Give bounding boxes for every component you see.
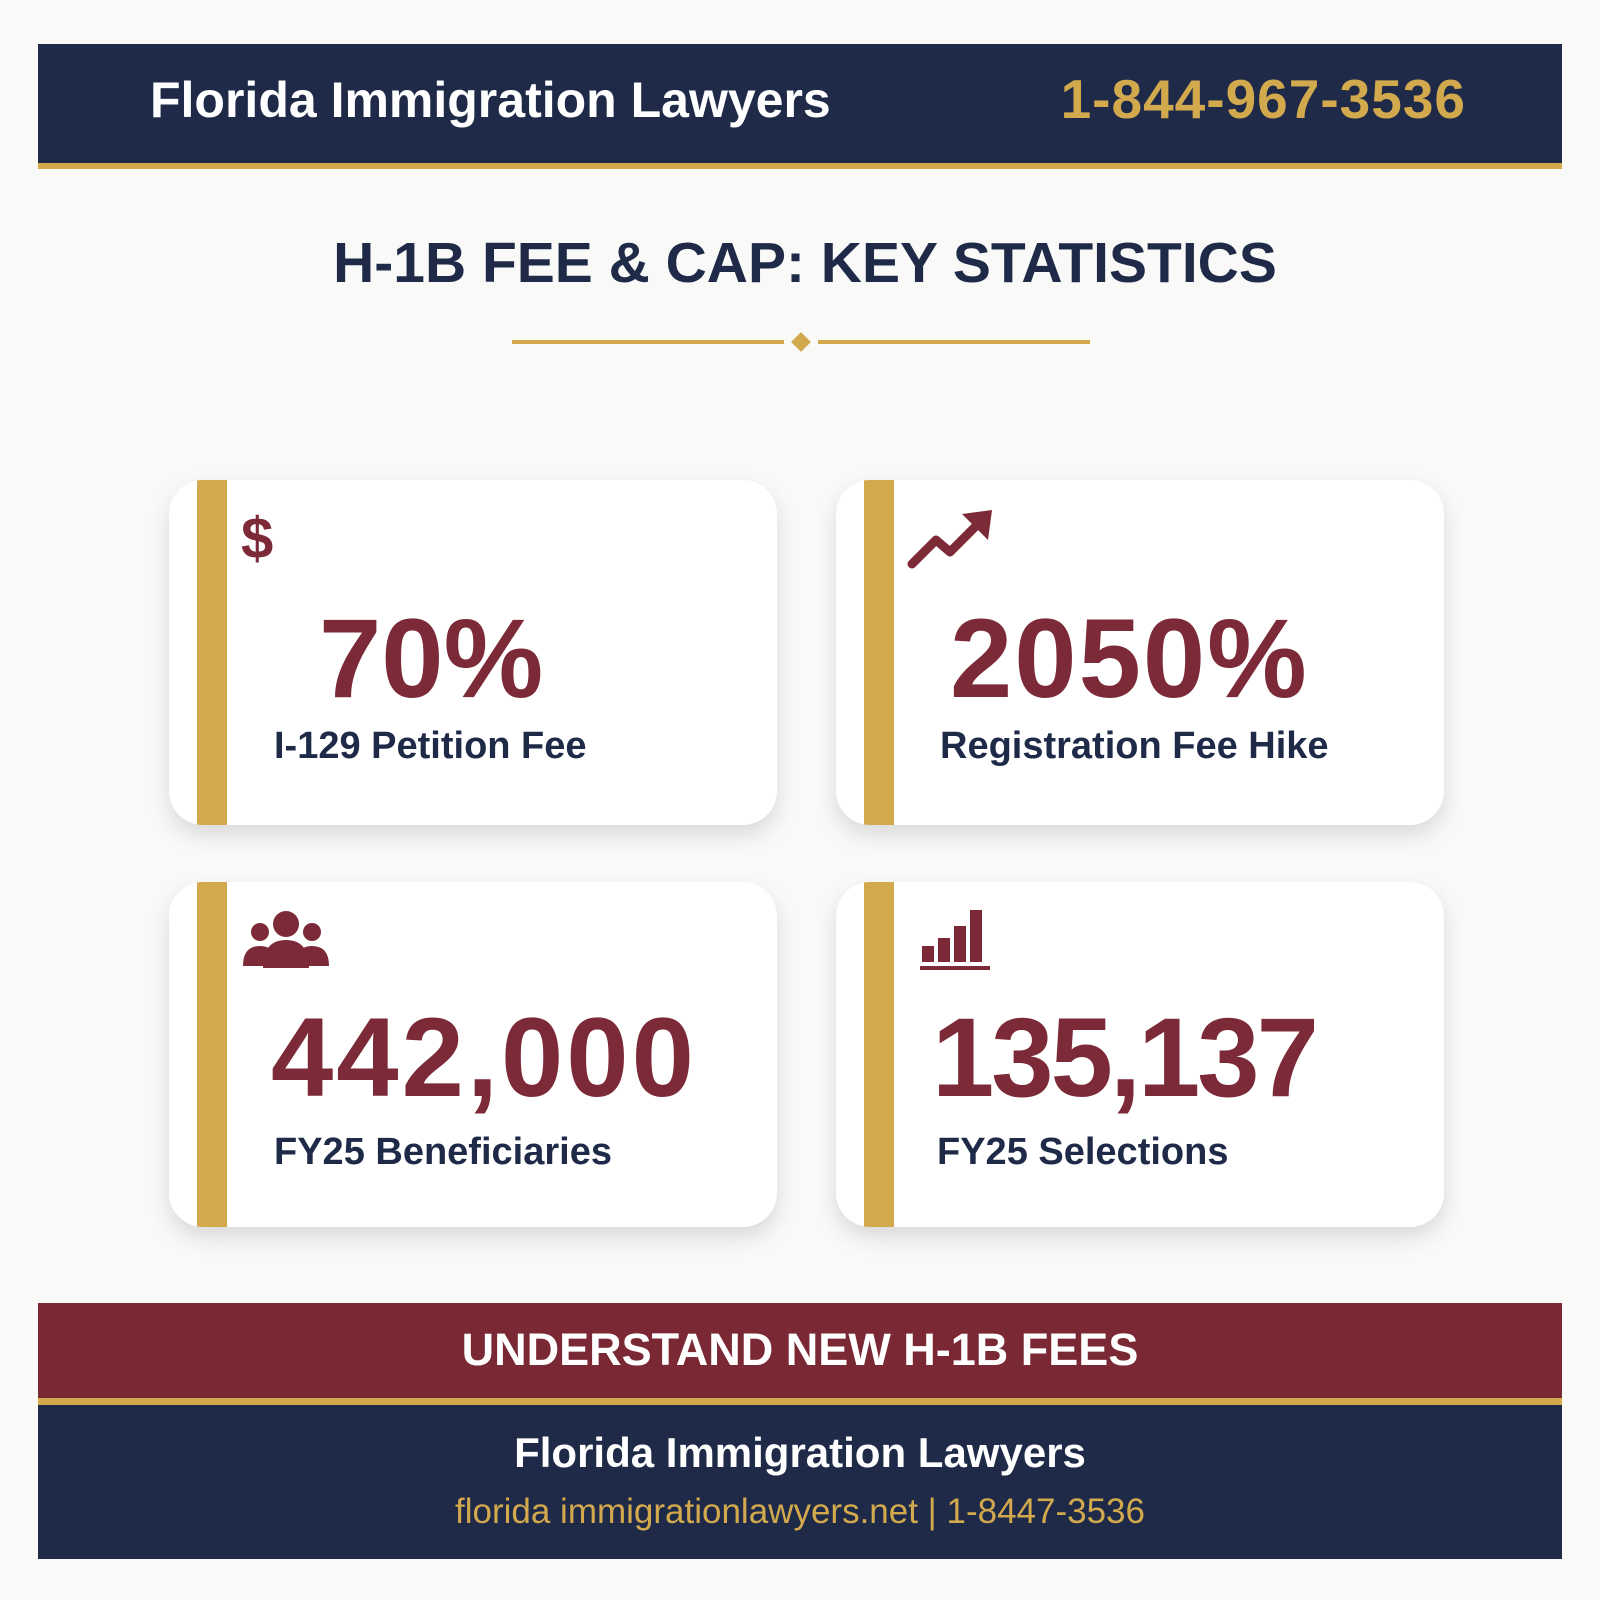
stat 70%: 70% — [319, 596, 543, 721]
title divider — [512, 332, 1090, 352]
stat 135,137: 135,137 — [932, 995, 1316, 1120]
red banner — [38, 1303, 1562, 1405]
card: FY25 beneficiaries — [169, 882, 777, 1227]
footer contact: florida immigrationlawyers.net | 1-8447-3536 — [455, 1492, 1145, 1531]
title: H-1B FEE & CAP: KEY STATISTICS — [333, 231, 1277, 295]
footer — [38, 1405, 1562, 1559]
label: Registration Fee Hike — [940, 725, 1329, 767]
label: FY25 Beneficiaries — [274, 1131, 612, 1173]
icon: bar chart — [920, 910, 990, 970]
card: FY25 selections — [836, 882, 1444, 1227]
banner text: UNDERSTAND NEW H-1B FEES — [462, 1324, 1138, 1375]
header bar — [38, 44, 1562, 169]
label: I-129 Petition Fee — [274, 725, 587, 767]
header phone: 1-844-967-3536 — [1061, 68, 1466, 130]
footer firm name: Florida Immigration Lawyers — [514, 1429, 1086, 1476]
stat 442,000: 442,000 — [271, 995, 697, 1120]
icon: dollar: $ — [241, 506, 273, 571]
header firm name: Florida Immigration Lawyers — [150, 72, 831, 128]
card: I-129 petition fee — [169, 480, 777, 825]
label: FY25 Selections — [937, 1131, 1228, 1173]
icon: people — [243, 911, 329, 968]
stat 2050%: 2050% — [950, 596, 1309, 721]
icon: trend arrow — [908, 510, 992, 568]
card: registration fee hike — [836, 480, 1444, 825]
